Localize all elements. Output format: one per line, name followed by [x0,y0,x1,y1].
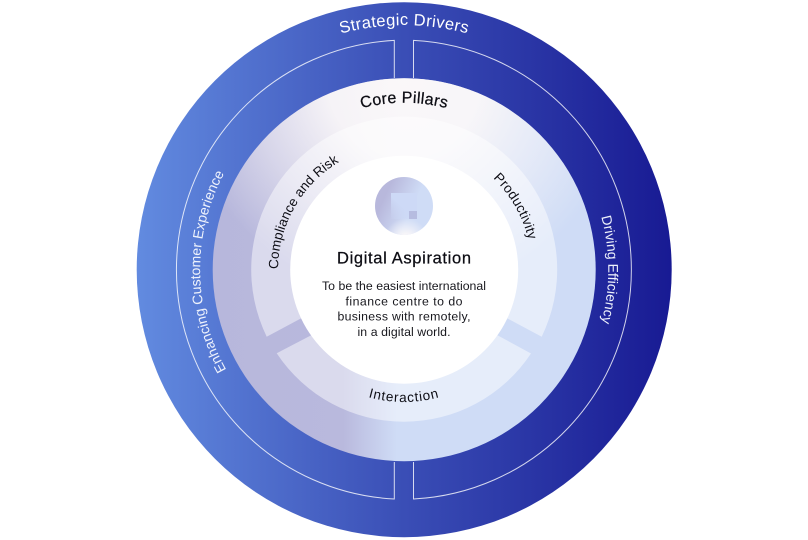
core pillars ring [213,78,596,461]
text block: aspiration statement [322,279,486,339]
bracket line: left driver [176,40,394,499]
segment: compliance, risk and productivity arc [251,117,557,337]
text block: aspiration statement: in a digital world. [358,325,450,339]
label: Driving Efficiency: Driving Efficiency [600,216,618,324]
text block: aspiration statement: To be the easiest international [322,279,486,293]
text block: aspiration statement: finance centre to do [346,294,463,308]
text block: aspiration statement: business with remotely, [338,310,470,324]
heading: Core Pillars: Core Pillars [360,91,448,108]
heading: Strategic Drivers: Strategic Drivers [340,13,468,33]
bracket line: right driver [414,40,631,499]
label: Interaction: Interaction [370,388,438,402]
label: Enhancing Customer Experience: Enhancing Customer Experience [191,172,226,374]
centre disc [290,156,518,384]
label: Productivity: Productivity [494,172,536,238]
label: Compliance and Risk: Compliance and Risk [268,156,339,268]
heading: Digital Aspiration: Digital Aspiration [337,250,471,268]
icon: pixel logo [375,177,433,235]
segment: interaction arc [277,335,531,422]
